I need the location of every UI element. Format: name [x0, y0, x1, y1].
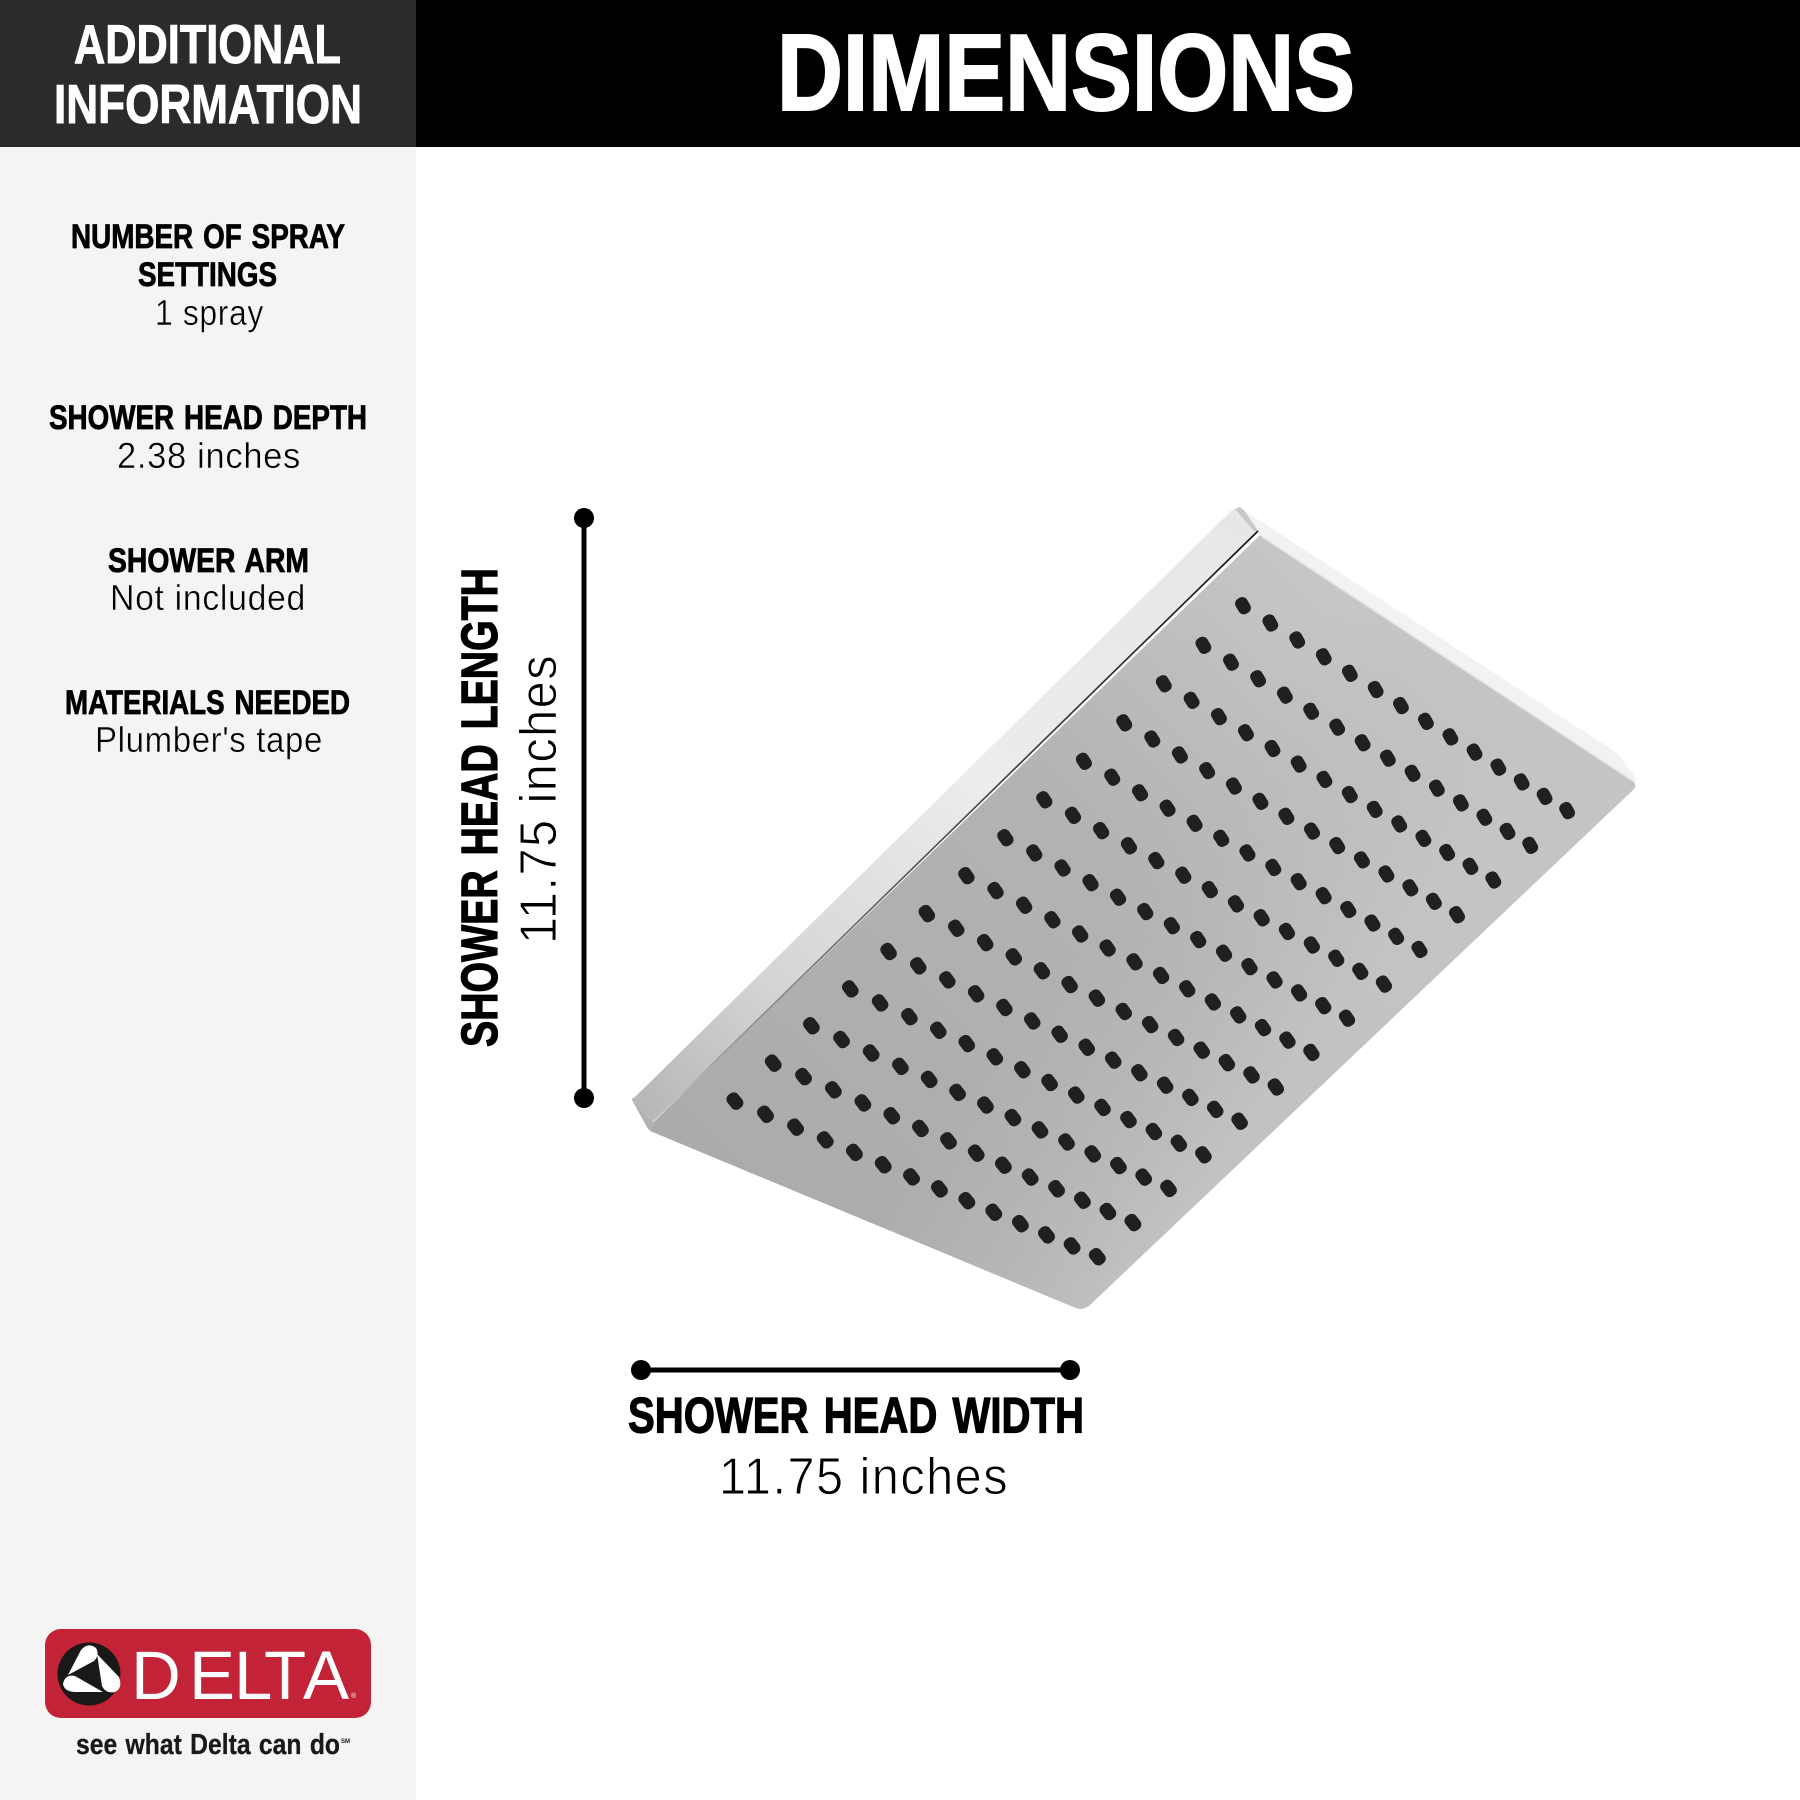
- logo: Delta: ®: [351, 1692, 357, 1700]
- spec: shower head depth: [49, 399, 367, 476]
- spec: materials needed: MATERIALS NEEDED: [65, 684, 350, 722]
- header: dimensions title: DIMENSIONS: [777, 12, 1355, 134]
- logo: Delta: DELTA: [131, 1637, 349, 1714]
- left bevel: [632, 508, 1258, 1122]
- spec: shower head depth: 2.38 inches: [117, 435, 301, 476]
- label: shower head length: SHOWER HEAD LENGTH: [451, 568, 508, 1047]
- spec: number of spray settings: NUMBER OF SPRAY: [71, 218, 345, 256]
- panel: additional information sidebar: [0, 147, 416, 1800]
- chrome face plate: [650, 535, 1635, 1309]
- logo tagline: SM: [341, 1739, 350, 1745]
- value: length 11.75 inches: 11.75 inches: [510, 654, 568, 944]
- logo: Delta: [45, 1629, 371, 1718]
- spec: number of spray settings: 1 spray: [155, 292, 264, 333]
- value: width 11.75 inches: 11.75 inches: [719, 1448, 1009, 1506]
- top-right bevel: [1243, 510, 1636, 782]
- header: dimensions title: [416, 0, 1800, 147]
- spec: shower arm: Not included: [110, 577, 306, 618]
- header: additional information: INFORMATION: [54, 73, 362, 135]
- logo tagline: see what Delta can do: [76, 1729, 340, 1761]
- label: shower head width: SHOWER HEAD WIDTH: [628, 1388, 1084, 1444]
- shower head illustration: [632, 507, 1636, 1309]
- spec: number of spray settings: [71, 218, 345, 333]
- spray nozzles: [721, 592, 1581, 1270]
- spec: materials needed: [65, 684, 350, 760]
- spec: number of spray settings: SETTINGS: [138, 256, 277, 294]
- spec: shower head depth: SHOWER HEAD DEPTH: [49, 399, 367, 437]
- length dimension line: [574, 508, 594, 1108]
- header: additional information: ADDITIONAL: [74, 13, 341, 75]
- width dimension line: [631, 1360, 1080, 1380]
- spec: materials needed: Plumber's tape: [95, 719, 323, 760]
- seam line: [653, 531, 1258, 1122]
- header: additional information: [0, 0, 416, 147]
- spec: shower arm: SHOWER ARM: [108, 542, 309, 580]
- corner facets: [1235, 507, 1258, 531]
- spec: shower arm: [108, 542, 309, 618]
